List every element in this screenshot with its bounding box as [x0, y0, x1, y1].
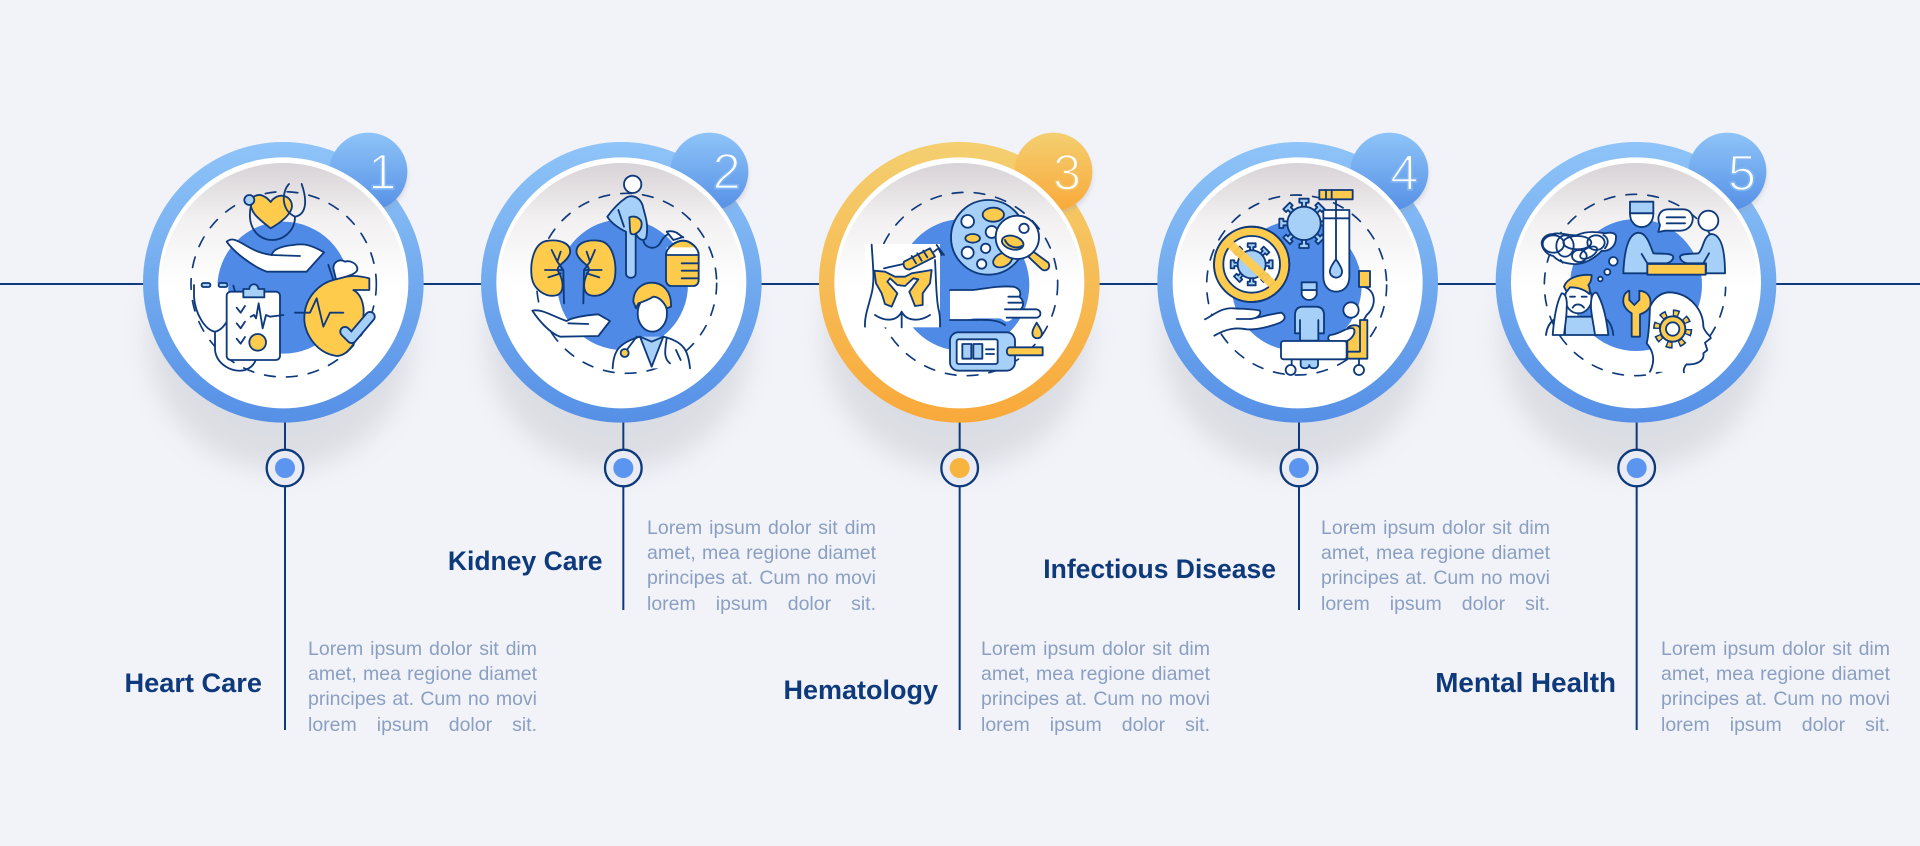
- icon: hematology illustration: [865, 192, 1058, 376]
- text block: kidney care: amet, mea regione diamet: [647, 542, 876, 564]
- text block: heart care: lorem ipsum dolor sit.: [308, 714, 537, 736]
- heading: mental health: Mental Health: [1435, 667, 1616, 698]
- text block: infectious disease: amet, mea regione diamet: [1321, 542, 1550, 564]
- panel: step 4 infectious disease: [1043, 132, 1550, 615]
- number badge: 4: [1390, 145, 1418, 201]
- drop shadow: [148, 207, 412, 470]
- icon: kidney care illustration: [531, 176, 717, 373]
- text block: hematology: amet, mea regione diamet: [981, 663, 1210, 685]
- text block: heart care: Lorem ipsum dolor sit dim: [308, 638, 537, 660]
- text block: mental health: principes at. Cum no movi: [1661, 688, 1890, 710]
- number badge: [329, 133, 407, 213]
- orange ring: [819, 142, 1100, 423]
- connector with node: [1618, 422, 1655, 730]
- icon: mental health illustration: [1542, 194, 1728, 376]
- heading: heart care: Heart Care: [124, 667, 262, 698]
- timeline axis: [0, 283, 1920, 285]
- white dish: [158, 157, 408, 408]
- text block: mental health: amet, mea regione diamet: [1661, 663, 1890, 685]
- text block: infectious disease: principes at. Cum no movi: [1321, 567, 1550, 589]
- text block: heart care: principes at. Cum no movi: [308, 688, 537, 710]
- connector with node: [605, 422, 642, 610]
- number badge: [1014, 133, 1092, 213]
- number badge: 1: [368, 144, 396, 200]
- text block: heart care: amet, mea regione diamet: [308, 663, 537, 685]
- blue ring: [1157, 142, 1438, 423]
- panel: step 3 hematology: [783, 132, 1210, 736]
- icon: infectious disease illustration: [1205, 190, 1387, 375]
- blue ring: [1496, 142, 1776, 423]
- text block: kidney care: principes at. Cum no movi: [647, 567, 876, 589]
- panel: step 5 mental health: [1435, 132, 1890, 736]
- text block: hematology: Lorem ipsum dolor sit dim: [981, 638, 1210, 660]
- white dish: [1511, 157, 1761, 408]
- text block: infectious disease: lorem ipsum dolor sit.: [1321, 593, 1550, 615]
- number badge: [1688, 133, 1766, 213]
- white dish: [496, 157, 746, 408]
- panel: step 2 kidney care: [448, 132, 876, 615]
- number badge: [670, 133, 748, 213]
- text block: hematology: principes at. Cum no movi: [981, 688, 1210, 710]
- panel: step 1 heart care: [124, 132, 537, 736]
- number badge: [1350, 133, 1428, 213]
- text block: mental health: [1661, 638, 1890, 736]
- heading: infectious disease: Infectious Disease: [1043, 554, 1276, 584]
- heading: hematology: Hematology: [783, 675, 938, 705]
- icon: heart care illustration: [191, 184, 376, 377]
- text block: hematology: [981, 638, 1210, 736]
- white dish: [1173, 157, 1423, 408]
- number badge: 5: [1728, 145, 1756, 201]
- text block: kidney care: lorem ipsum dolor sit.: [647, 593, 876, 615]
- drop shadow: [487, 207, 750, 470]
- text block: mental health: Lorem ipsum dolor sit dim: [1661, 638, 1890, 660]
- text block: kidney care: [647, 517, 876, 615]
- white dish: [834, 157, 1084, 408]
- connector with node: [267, 422, 303, 730]
- connector with node: [941, 422, 978, 730]
- connector with node: [1281, 422, 1317, 610]
- number badge: 3: [1053, 144, 1081, 200]
- drop shadow: [1163, 207, 1427, 470]
- text block: kidney care: Lorem ipsum dolor sit dim: [647, 517, 876, 539]
- drop shadow: [825, 207, 1088, 470]
- number badge: 2: [713, 143, 741, 199]
- text block: heart care: [308, 638, 537, 736]
- drop shadow: [1502, 207, 1765, 470]
- blue ring: [143, 142, 424, 423]
- heading: kidney care: Kidney Care: [448, 546, 602, 576]
- text block: infectious disease: [1321, 517, 1550, 615]
- text block: mental health: lorem ipsum dolor sit.: [1661, 714, 1890, 736]
- text block: hematology: lorem ipsum dolor sit.: [981, 714, 1210, 736]
- text block: infectious disease: Lorem ipsum dolor sit dim: [1321, 517, 1550, 539]
- blue ring: [481, 142, 762, 423]
